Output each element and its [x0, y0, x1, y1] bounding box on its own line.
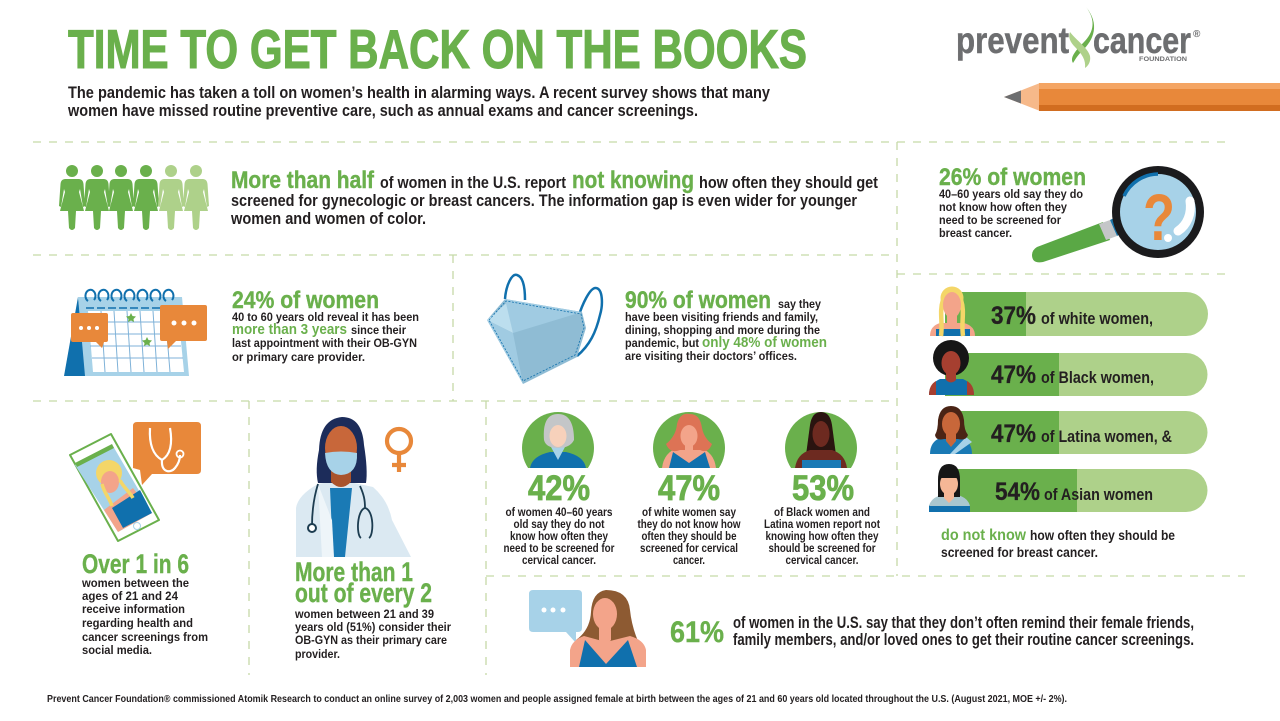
stat: 42%: of women 40–60 years: [506, 506, 612, 519]
icon: white woman with blonde braids: [930, 286, 975, 336]
stat: 42%: 42%: [528, 469, 590, 508]
text: more than 1 out of every 2: out of every 2: [295, 578, 432, 608]
logo: Prevent Cancer Foundation: FOUNDATION: [1139, 57, 1187, 63]
bar: 47% of Latina women: [945, 411, 1208, 454]
title: TIME TO GET BACK ON THE BOOKS: [68, 18, 807, 80]
text: 26% of women: need to be screened for: [939, 213, 1061, 227]
stat: 47%: 47%: [658, 469, 720, 508]
stat: 42%: cervical cancer.: [522, 554, 596, 567]
text: 61% of women: 61%: [670, 616, 724, 649]
icon: magnifying glass: [1032, 166, 1204, 262]
text: more than 1 out of every 2: More than 1: [295, 557, 413, 587]
text: do not know: screened for breast cancer.: [941, 545, 1098, 560]
stat: 42%: old say they do not: [514, 518, 605, 531]
icon: older woman in green circle: [522, 412, 594, 468]
text: over 1 in 6: [81, 549, 208, 657]
bar: 47% of Latina women: of Latina women, &: [1041, 427, 1172, 446]
stat: 53%: should be screened for: [768, 542, 876, 555]
intro text: women have missed routine preventive care, such as annual exams and cancer screenings.: [67, 102, 698, 120]
text: more than 1 out of every 2: women between 21 and 39: [294, 607, 434, 621]
stat: 47%: [638, 469, 741, 567]
stat: 47%: of white women say: [642, 506, 736, 519]
text: more than half: More than half: [231, 167, 375, 194]
stat: 53%: of Black women and: [774, 506, 870, 519]
text: 26% of women: 40–60 years old say they do: [939, 187, 1083, 201]
logo: Prevent Cancer Foundation: cancer: [1093, 20, 1191, 61]
intro text: [67, 84, 771, 120]
footnote: Prevent Cancer Foundation® commissioned Atomik Research to conduct an online survey of 2,003 women and people assigned female at birth between the ages of 21 and 60 years old located throughout the U.S. (August 2021, MOE +/- 2%).: [47, 693, 1067, 705]
icon: Black woman with afro: [929, 340, 974, 395]
logo: Prevent Cancer Foundation: ®: [1193, 29, 1201, 40]
bar: 47% of Black women: of Black women,: [1041, 368, 1154, 387]
text: more than half: of women in the U.S. report: [380, 174, 566, 192]
text: 90% of women: have been visiting friends and family,: [625, 310, 818, 324]
text: 26% of women: breast cancer.: [939, 226, 1012, 240]
bar: 47% of Black women: 47%: [991, 361, 1036, 389]
icon: Black woman in green circle: [785, 412, 857, 468]
text: 26% of women: 26% of women: [939, 164, 1086, 191]
bar: 37% of white women: of white women,: [1041, 309, 1153, 328]
text: over 1 in 6: Over 1 in 6: [82, 549, 189, 579]
text: 90% of women: dining, shopping and more during the: [625, 323, 820, 337]
text: 90% of women: pandemic, but: [625, 336, 699, 350]
text: 26% of women: not know how often they: [939, 200, 1067, 214]
bar: 37% of white women: [945, 292, 1208, 336]
text: over 1 in 6: women between the: [81, 576, 189, 590]
text: 90% of women: 90% of women: [625, 287, 771, 314]
stat: 53%: cervical cancer.: [786, 554, 858, 567]
stat: 53%: Latina women report not: [764, 518, 880, 531]
bar: 37% of white women: 37%: [991, 302, 1036, 330]
icon: female symbol: [387, 429, 411, 472]
icon: smartphone and stethoscope bubble: [70, 422, 201, 541]
text: do not know: do not know: [941, 527, 1027, 544]
text: over 1 in 6: regarding health and: [82, 616, 193, 630]
text: 24% of women: last appointment with their OB-GYN: [232, 336, 417, 350]
bar: 54% of Asian women: of Asian women: [1044, 485, 1153, 504]
text: 24% of women: more than 3 years: [232, 322, 347, 338]
stat: 53%: [764, 469, 880, 567]
text: 24% of women: [232, 287, 419, 364]
icon: Asian woman: [929, 464, 970, 512]
text: over 1 in 6: cancer screenings from: [82, 630, 208, 644]
text: more than half: screened for gynecologic or breast cancers. The information gap is even wider for younger: [231, 192, 857, 210]
icon: six women, four dark and two light: [59, 165, 209, 230]
bar: 54% of Asian women: 54%: [995, 478, 1040, 506]
text: 61% of women: [670, 614, 1194, 649]
icon: calendar with speech bubbles: [64, 290, 207, 376]
icon: magnifying glass: ?: [1143, 180, 1175, 254]
text: 90% of women: are visiting their doctors’ offices.: [625, 349, 797, 363]
icon: Latina woman: [930, 406, 972, 454]
stat: 42%: need to be screened for: [504, 542, 615, 555]
logo: Prevent Cancer Foundation: [956, 7, 1201, 68]
intro text: The pandemic has taken a toll on women’s health in alarming ways. A recent survey shows that many: [68, 84, 771, 102]
icon: doctor wearing a mask: [296, 417, 411, 557]
text: 24% of women: since their: [351, 323, 406, 337]
text: more than half: women and women of color.: [230, 210, 426, 228]
text: more than half: not knowing: [572, 167, 694, 194]
stat: 47%: often they should be: [642, 530, 737, 543]
logo: Prevent Cancer Foundation: prevent: [956, 20, 1069, 61]
text: 90% of women: only 48% of women: [702, 335, 827, 351]
icon: pencil: [1004, 83, 1280, 111]
text: 90% of women: [625, 287, 827, 363]
stat: 42%: [504, 469, 615, 567]
bar: 47% of Latina women: 47%: [991, 420, 1036, 448]
stat: 42%: know how often they: [510, 530, 608, 543]
text: 26% of women: [939, 164, 1086, 240]
text: 90% of women: say they: [778, 297, 821, 311]
text: more than 1 out of every 2: [294, 557, 451, 661]
stat: 47%: they do not know how: [638, 518, 741, 531]
text: 24% of women: 24% of women: [232, 287, 379, 314]
text: 24% of women: or primary care provider.: [232, 350, 365, 364]
text: 24% of women: 40 to 60 years old reveal it has been: [232, 310, 419, 324]
stat: 47%: cancer.: [673, 554, 705, 567]
text: more than half: how often they should get: [699, 174, 878, 192]
stat: 53%: knowing how often they: [766, 530, 879, 543]
text: more than 1 out of every 2: provider.: [295, 647, 340, 661]
text: over 1 in 6: ages of 21 and 24: [82, 589, 178, 603]
bar: 47% of Black women: [945, 353, 1208, 396]
icon: woman with speech bubble: [529, 590, 646, 667]
text: over 1 in 6: social media.: [82, 643, 152, 657]
stat: 53%: 53%: [792, 469, 854, 508]
stat: 47%: screened for cervical: [640, 542, 738, 555]
text: more than half: [230, 167, 878, 228]
icon: white woman in green circle: [653, 412, 725, 468]
bar: 54% of Asian women: [945, 469, 1208, 512]
text: do not know: how often they should be: [1030, 528, 1175, 543]
icon: face mask: [487, 275, 602, 384]
text: do not know: [941, 527, 1175, 560]
text: more than 1 out of every 2: OB-GYN as their primary care: [295, 633, 447, 647]
text: over 1 in 6: receive information: [82, 602, 185, 616]
text: more than 1 out of every 2: years old (51%) consider their: [295, 620, 451, 634]
